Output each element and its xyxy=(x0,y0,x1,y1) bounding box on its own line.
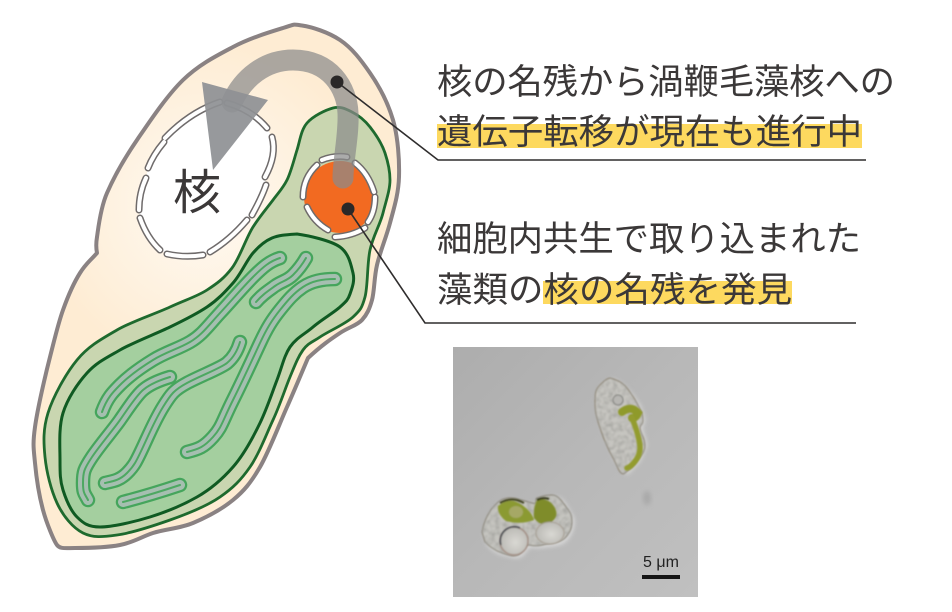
lower cell xyxy=(482,495,574,558)
caption: algal nucleus xyxy=(437,219,861,310)
chloroplast xyxy=(60,234,354,527)
caption line 2: 遺伝子転移が現在も進行中 xyxy=(437,112,862,152)
cell diagram xyxy=(34,25,399,548)
scale bar xyxy=(642,554,680,579)
caption line 1: 核の名残から渦鞭毛藻核への xyxy=(437,62,895,102)
leader line: algal nucleus xyxy=(342,202,856,323)
scale bar: 5 μm xyxy=(643,554,679,571)
thylakoids xyxy=(83,258,335,502)
highlight xyxy=(543,281,792,304)
caption line 3: 細胞内共生で取り込まれた xyxy=(437,219,861,259)
upper cell xyxy=(595,378,647,475)
leader line: gene transfer xyxy=(330,76,866,160)
algal compartment xyxy=(44,107,390,537)
highlight xyxy=(437,124,862,148)
faint speck xyxy=(643,492,651,504)
caption: gene transfer xyxy=(437,62,895,152)
arrow: gene transfer xyxy=(202,60,348,178)
cell body xyxy=(34,25,399,548)
nucleus label: 核 xyxy=(173,167,221,220)
micrograph xyxy=(453,347,698,597)
caption line 4: 藻類の核の名残を発見 xyxy=(437,270,792,310)
algal nucleus xyxy=(303,156,376,237)
host nucleus xyxy=(139,102,273,256)
